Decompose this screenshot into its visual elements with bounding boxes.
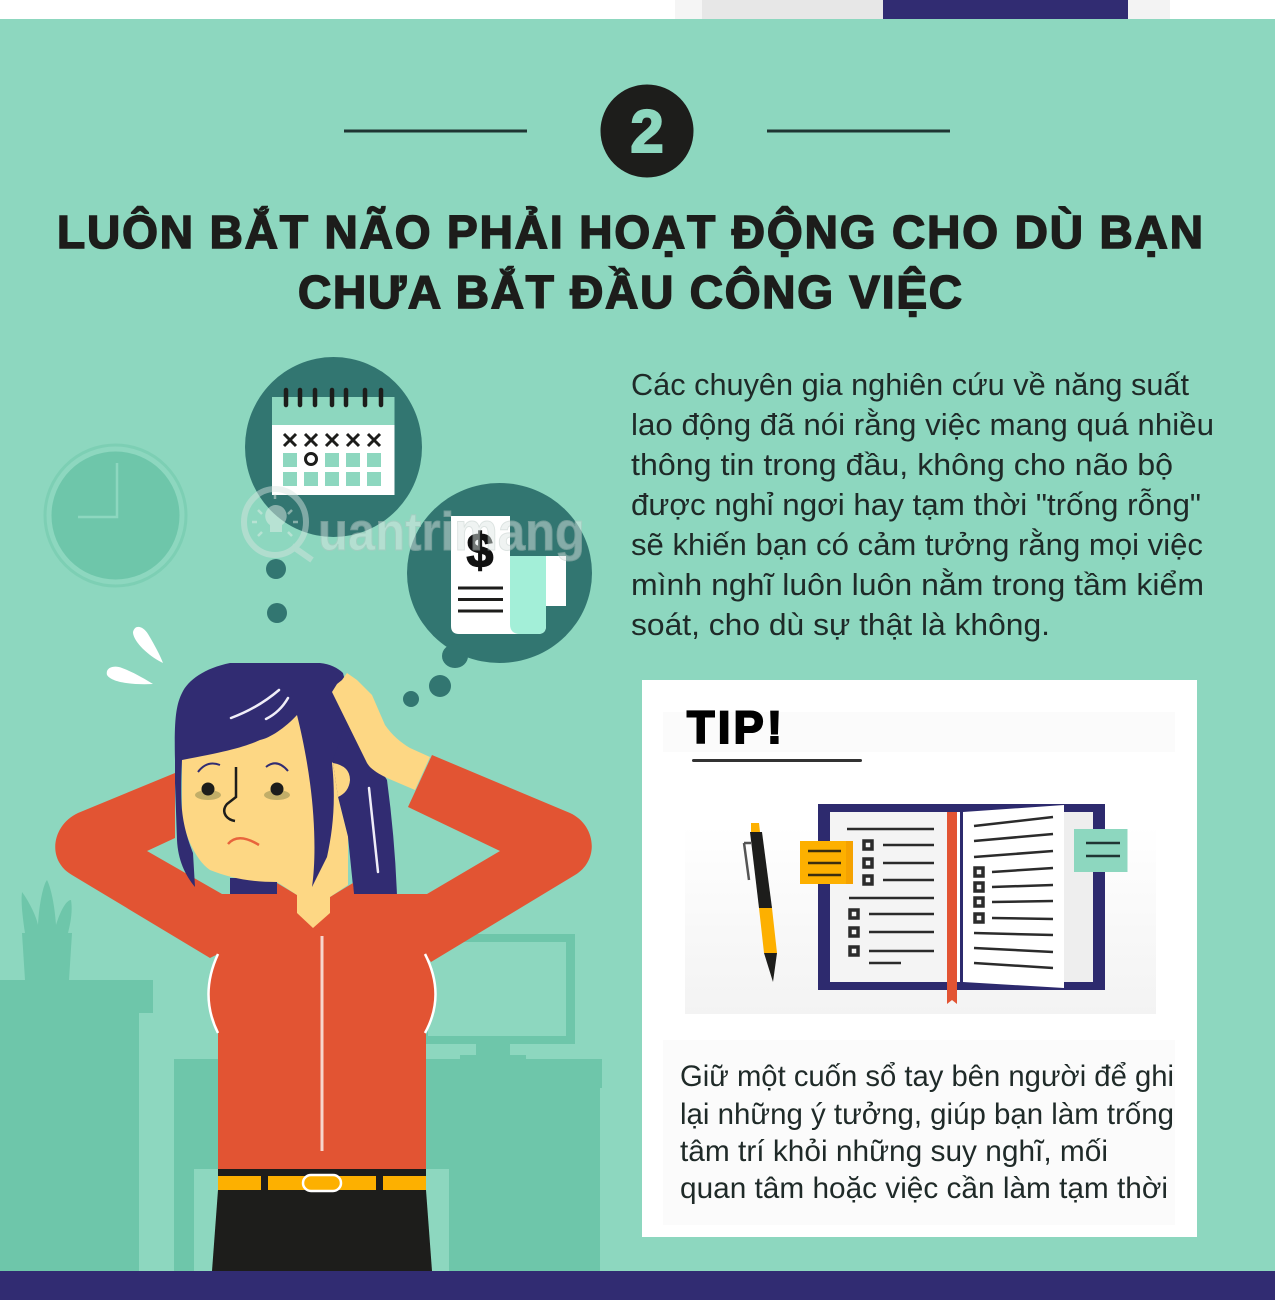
- shirt: [55, 755, 592, 1170]
- body paragraph: sẽ khiến bạn có cảm tưởng rằng mọi việc: [631, 527, 1203, 562]
- tip text: lại những ý tưởng, giúp bạn làm trống: [680, 1098, 1174, 1131]
- thought bubble: bill: $: [467, 525, 494, 578]
- tip text: quan tâm hoặc việc cần làm tạm thời: [680, 1172, 1168, 1205]
- trousers: [212, 1190, 432, 1271]
- watermark: uantrimang: [318, 502, 585, 562]
- belt buckle: [303, 1175, 341, 1191]
- body paragraph: lao động đã nói rằng việc mang quá nhiều: [631, 407, 1214, 442]
- body paragraph: Các chuyên gia nghiên cứu về năng suất: [631, 367, 1189, 402]
- stress marks: [107, 627, 163, 684]
- sticky note: green: [1074, 829, 1128, 872]
- hand: [332, 673, 430, 790]
- thought bubble dots left: [266, 559, 287, 623]
- heading: LUÔN BẮT NÃO PHẢI HOẠT ĐỘNG CHO DÙ BẠN: [57, 206, 1203, 258]
- body paragraph: được nghỉ ngơi hay tạm thời "trống rỗng": [631, 487, 1201, 522]
- eyebrows: [198, 763, 288, 772]
- nose: [224, 767, 236, 821]
- icon: open notebook: [818, 804, 1105, 1004]
- mouth: [228, 838, 259, 845]
- tip text: Giữ một cuốn sổ tay bên người để ghi: [680, 1060, 1174, 1093]
- thought bubble: calendar: [245, 357, 422, 537]
- hair highlights: [231, 690, 378, 872]
- hair front: [175, 663, 350, 887]
- heading: CHƯA BẮT ĐẦU CÔNG VIỆC: [298, 266, 962, 318]
- tip underline: [692, 759, 862, 762]
- thought bubble: bill: [407, 483, 592, 668]
- heading: [57, 206, 1203, 318]
- body paragraph: thông tin trong đầu, không cho não bộ: [631, 447, 1173, 482]
- hair back: [230, 690, 397, 896]
- bust outlines: [208, 954, 436, 1033]
- bottom bar: [0, 1271, 1275, 1300]
- icon: pen: [744, 823, 777, 982]
- icon: wall clock: [45, 445, 186, 586]
- top strip: [0, 0, 1275, 19]
- watermark: [244, 489, 585, 562]
- thought bubble dots right: [403, 675, 451, 707]
- eyes: [195, 782, 290, 800]
- woman character: [55, 663, 592, 1271]
- section number badge: 2: [630, 98, 664, 165]
- body paragraph: mình nghĩ luôn luôn nằm trong tầm kiểm: [631, 567, 1204, 602]
- tip text: [680, 1060, 1174, 1205]
- tip text background: [663, 1040, 1175, 1225]
- panel: tip card: [642, 680, 1197, 1237]
- body paragraph: [631, 367, 1214, 642]
- belt straps: [218, 1176, 426, 1190]
- background furniture: [0, 880, 602, 1271]
- tip heading: TIP!: [687, 702, 782, 753]
- body paragraph: soát, cho dù sự thật là không.: [631, 607, 1050, 642]
- sticky note: yellow: [800, 841, 853, 884]
- ear: [333, 763, 350, 797]
- shirt seam: [320, 936, 324, 1151]
- section number badge: [344, 84, 950, 178]
- illustration background: [685, 825, 1156, 1014]
- belt: [218, 1169, 426, 1190]
- face and neck: [182, 715, 348, 928]
- tip text: tâm trí khỏi những suy nghĩ, mối: [680, 1135, 1108, 1168]
